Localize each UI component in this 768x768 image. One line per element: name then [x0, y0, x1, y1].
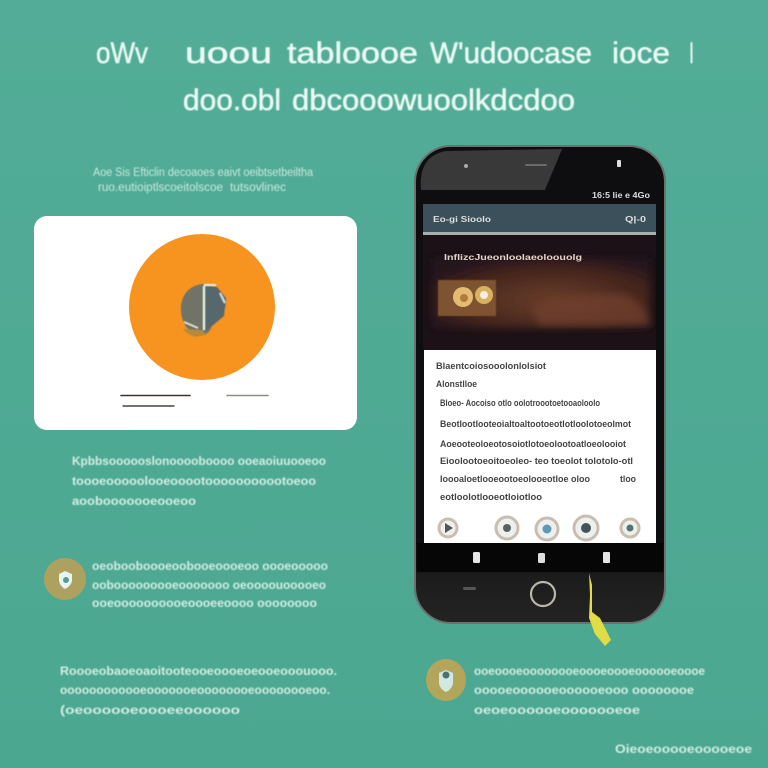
intro text: ruo.eutioiptlscoeitolscoe	[98, 182, 223, 194]
back key	[463, 587, 476, 590]
hero image: InflizcJueonloolaeoloouolg	[444, 253, 582, 262]
paragraph three: oooooooooooeooooooeoooooooeoooooooeoo.	[60, 683, 330, 697]
phone body	[415, 146, 665, 623]
screen content: tloo	[620, 474, 636, 485]
paragraph four: ooooeoooooeoooooeooo oooooooe	[474, 683, 694, 697]
paragraph four	[474, 664, 705, 717]
paragraph four: oeoeoooooeooooooeoe	[474, 703, 640, 717]
intro text	[93, 167, 314, 194]
title: dbcooowuoolkdcdoo	[292, 84, 575, 117]
title: tabloooe	[287, 37, 418, 70]
panel: white card	[34, 216, 357, 430]
icon: badge two	[426, 659, 466, 701]
paragraph two: oobooooooooeooooooo oeoooouooooeo	[92, 578, 326, 592]
app bar: Eo-gi Sioolo	[433, 215, 491, 224]
title: ioce	[612, 37, 670, 70]
paragraph three: Roooeobaoeoaoitooteooeoooeoeooeooouooo.	[60, 664, 337, 678]
intro text: tutsovlinec	[230, 182, 286, 194]
home button	[531, 582, 555, 606]
screen content: Alonstlloe	[436, 379, 477, 390]
intro text: Aoe Sis Efticlin decoaoes eaivt oeibtsetbeiltha	[93, 167, 314, 179]
icon: badge one	[44, 558, 86, 600]
paragraph one: toooeooooolooeooootooooooooootoeoo	[72, 474, 316, 488]
caption lines	[121, 396, 268, 406]
yellow streak	[589, 573, 611, 646]
paragraph two	[92, 559, 328, 610]
paragraph one: aoobooooooeooeoo	[72, 494, 196, 508]
paragraph one	[72, 454, 326, 508]
paragraph four: ooeoooeoooooooeoooeoooeoooooeoooe	[474, 664, 705, 678]
icon: centre emblem	[181, 284, 226, 337]
paragraph one: Kpbbsoooooslonooooboooo ooeaoiuuooeoo	[72, 454, 326, 468]
phone top glare	[421, 149, 562, 190]
footer text: Oieoeooooeooooeoe	[615, 742, 752, 756]
screen content: Bloeo- Aocoiso otlo oolotroootoetooaoloolo	[440, 398, 600, 409]
screen content: eotloolotlooeotloiotloo	[440, 492, 542, 503]
paragraph two: ooeoooooooooeoooeeoooo oooooooo	[92, 596, 317, 610]
orange circle	[129, 234, 275, 380]
paragraph three	[60, 664, 337, 717]
title: uoou	[185, 37, 272, 70]
paragraph three: (oeoooooeoooeeoooooo	[60, 703, 240, 717]
screen content: Ioooaloetlooeootoeolooeotloe oloo	[440, 474, 590, 485]
screen content: Blaentcoiosooolonlolsiot	[436, 361, 547, 372]
paragraph two: oeobooboooeoobooeoooeoo oooeooooo	[92, 559, 328, 573]
screen content: Aoeooteoloeotosoiotlotoeolootoatloeolooiot	[440, 439, 627, 450]
speaker and camera	[464, 160, 621, 168]
title: I	[689, 37, 694, 70]
nav bar	[417, 543, 663, 572]
screen content: Eioolootoeoitoeoleo- teo toeolot tolotolo-otl	[440, 456, 633, 467]
title: oWv	[96, 37, 148, 70]
screen content: Beotlootlooteoialtoaltootoeotlotloolotoeolmot	[440, 419, 632, 430]
app icons row	[439, 516, 639, 540]
title: doo.obl	[183, 84, 281, 117]
status bar: 16:5 lie e 4Go	[592, 191, 650, 200]
phone	[415, 146, 665, 646]
app bar: Q|-0	[625, 215, 647, 224]
hero image	[423, 235, 656, 350]
title: W'udoocase	[430, 37, 592, 70]
screen content	[424, 350, 656, 543]
title	[96, 37, 694, 117]
app bar	[423, 204, 656, 235]
